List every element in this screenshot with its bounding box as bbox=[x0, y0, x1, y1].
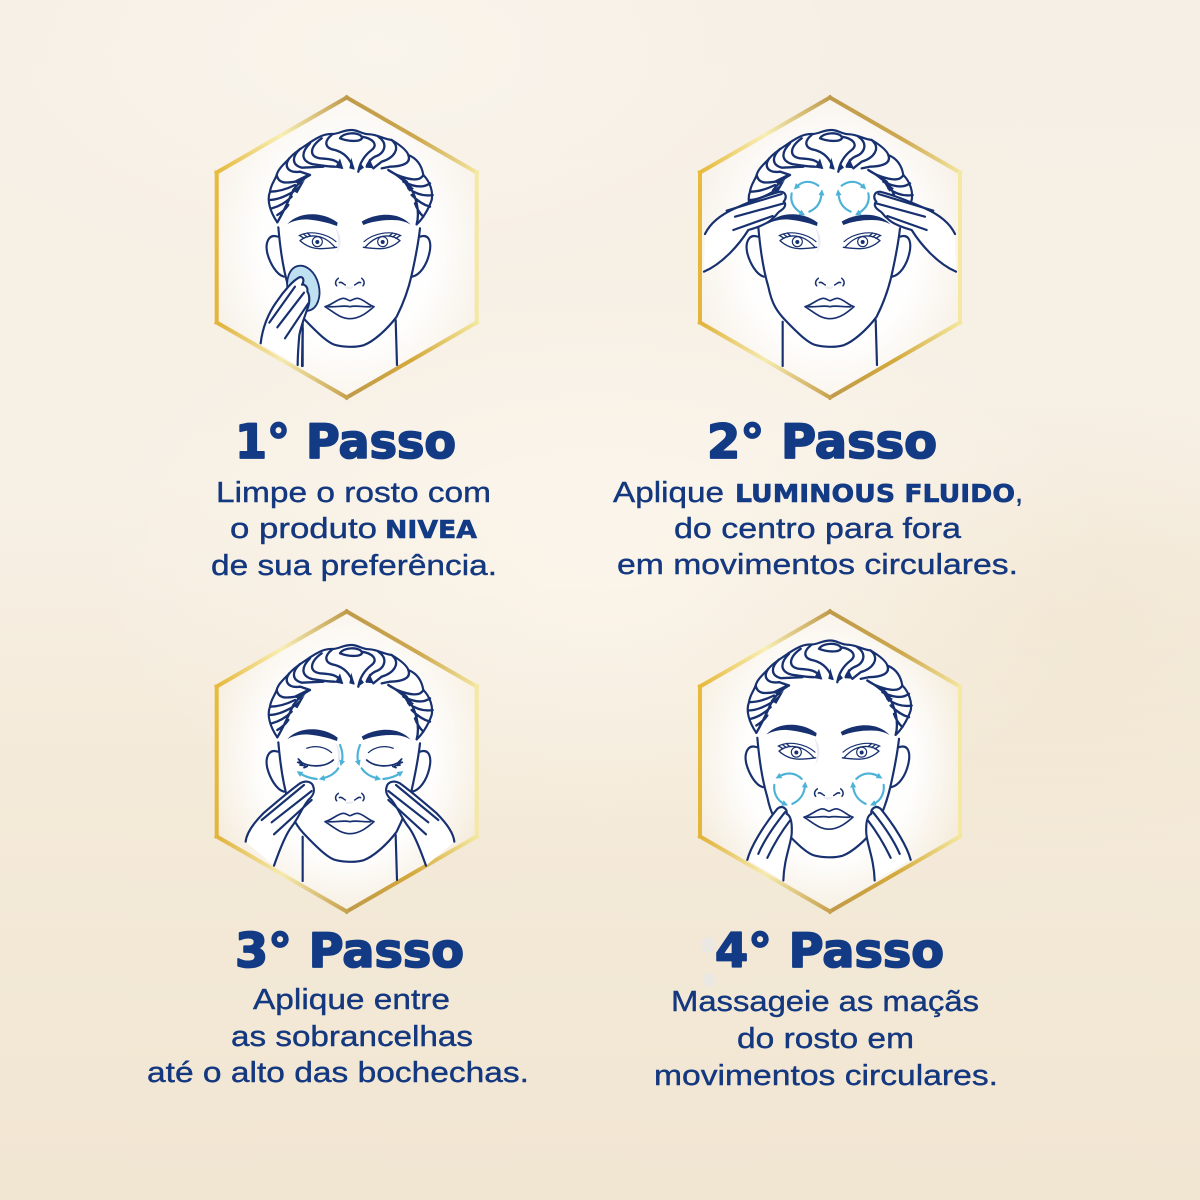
step 4 panel bbox=[654, 612, 998, 1092]
step 2 description: LUMINOUS FLUIDO bbox=[735, 479, 1015, 508]
step 1 description: o produto bbox=[230, 513, 377, 545]
step 2 description: em movimentos circulares. bbox=[617, 549, 1018, 581]
step 3 description: as sobrancelhas bbox=[231, 1021, 473, 1053]
step 2 hexagon frame bbox=[700, 98, 960, 398]
step 1 description: Limpe o rosto com bbox=[216, 477, 491, 509]
step 4 description: movimentos circulares. bbox=[654, 1060, 998, 1092]
step 4 description bbox=[654, 986, 998, 1092]
step 2 description: do centro para fora bbox=[674, 513, 962, 545]
step 1 panel bbox=[211, 98, 497, 582]
step 4 face illustration with hands on cheeks bbox=[746, 640, 912, 880]
step 3 description: até o alto das bochechas. bbox=[147, 1057, 529, 1089]
step 1 description: NIVEA bbox=[385, 515, 478, 544]
step 2 panel bbox=[613, 98, 1023, 581]
step 1 hexagon frame bbox=[217, 98, 477, 398]
step 4 sparkle marks bbox=[701, 937, 715, 987]
step 3 massage arrows bbox=[300, 745, 400, 779]
step 4 massage arrows bbox=[774, 773, 884, 804]
step 3 description bbox=[147, 984, 529, 1089]
step 3 heading: 3° Passo bbox=[235, 924, 464, 979]
step 2 face illustration with hands on forehead bbox=[704, 130, 956, 366]
step 1 description: de sua preferência. bbox=[211, 550, 497, 582]
step 4 description: Massageie as maçãs bbox=[671, 986, 979, 1018]
step 2 description: Aplique bbox=[613, 477, 724, 509]
step 4 description: do rosto em bbox=[737, 1023, 914, 1055]
step 4 heading: 4° Passo bbox=[715, 924, 944, 979]
step 1 description bbox=[211, 477, 497, 582]
step 3 face illustration with closed eyes and hands bbox=[246, 645, 454, 881]
step 3 panel bbox=[147, 612, 529, 1089]
step 3 description: Aplique entre bbox=[253, 984, 450, 1016]
step 2 massage arrows bbox=[791, 182, 869, 213]
step 1 heading: 1° Passo bbox=[235, 415, 456, 470]
step 2 heading: 2° Passo bbox=[707, 415, 937, 470]
step 4 hexagon frame bbox=[700, 612, 960, 912]
step 2 description bbox=[613, 477, 1023, 581]
step 3 hexagon frame bbox=[217, 612, 477, 912]
step 1 face illustration with cotton pad bbox=[261, 130, 433, 366]
step 2 description: , bbox=[1015, 477, 1023, 509]
